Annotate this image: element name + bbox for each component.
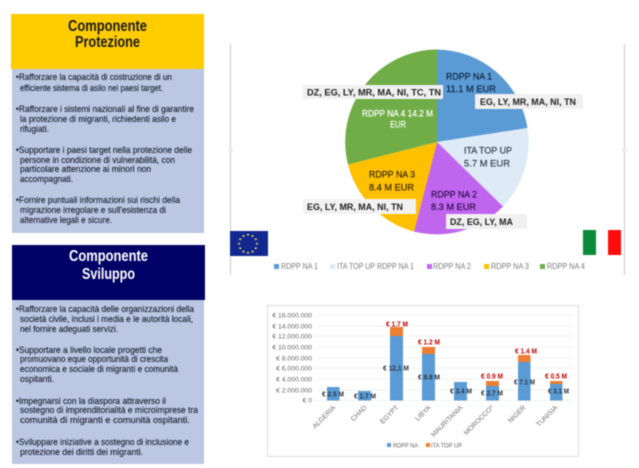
y axis labels: € 16.000.000 <box>272 312 312 320</box>
text block: protezione bullets: alternative legali e sicure. <box>20 215 112 225</box>
category labels: EGYPT <box>379 404 400 426</box>
pie chart: ITA TOP UP <box>464 146 512 156</box>
value labels: RDPP NA: € 3.1 M <box>548 386 569 396</box>
text block: sviluppo bullets: sostegno di imprenditorialità e microimprese tra <box>20 405 198 415</box>
text block: sviluppo bullets <box>12 300 204 464</box>
text block: protezione bullets: migrazione irregolare e sull'esistenza di <box>20 205 166 215</box>
text block: sviluppo bullets: promuovano eque opportunità di crescita <box>20 354 168 364</box>
y axis labels: € 2.000.000 <box>276 388 312 394</box>
value labels: RDPP NA: € 2.5 M <box>322 390 344 398</box>
pie chart: RDPP NA 2 <box>431 190 477 200</box>
callout: DZ EG LY MR MA NI TC TN: DZ, EG, LY, MR, MA, NI, TC, TN <box>307 88 441 98</box>
heading: componente sviluppo: Componente <box>69 248 148 265</box>
callout: EG LY MR MA NI TN blue: EG, LY, MR, MA, NI, TN <box>480 97 576 107</box>
text block: protezione bullets: •Rafforzare i sistemi nazionali al fine di garantire <box>16 104 194 114</box>
category labels: CHAD <box>350 404 368 423</box>
panel: pie chart frame <box>229 44 626 275</box>
callout: EG LY MR MA NI TN green-yellow: EG, LY, MR, MA, NI, TN <box>307 202 403 212</box>
text block: sviluppo bullets: •Impegnarsi con la diaspora attraverso il <box>16 396 166 406</box>
legend: bar chart: ITA TOP UP <box>431 442 462 450</box>
pie chart: 8.3 M EUR <box>431 202 476 213</box>
heading: componente protezione: Protezione <box>75 34 140 51</box>
text block: protezione bullets: la protezione di migranti, richiedenti asilo e <box>20 114 176 124</box>
pie chart: RDPP NA 3 <box>369 170 415 180</box>
legend: pie chart <box>274 262 585 271</box>
value labels: ITA TOP UP: € 1.4 M <box>515 346 537 356</box>
y axis labels: € 6.000.000 <box>276 366 312 372</box>
text block: sviluppo bullets: •Supportare a livello locale progetti che <box>16 345 162 355</box>
panel: componente sviluppo <box>12 245 205 464</box>
callout: DZ EG LY MA <box>446 214 527 229</box>
category labels <box>312 404 560 439</box>
y axis labels: € 10.000.000 <box>272 344 312 352</box>
callout: EG LY MR MA NI TN green-yellow <box>303 199 416 214</box>
legend: pie chart: RDPP NA 1 <box>281 262 318 271</box>
legend: pie chart: RDPP NA 3 <box>491 262 529 271</box>
legend: bar chart: RDPP NA <box>393 442 418 450</box>
value labels: RDPP NA <box>322 364 569 400</box>
value labels: RDPP NA: € 7.1 M <box>514 378 535 386</box>
text block: protezione bullets: particolare attenzione ai minori non <box>20 164 151 174</box>
y axis labels: € 0 <box>303 398 312 404</box>
text block: protezione bullets: efficiente sistema di asilo nei paesi target. <box>20 83 163 93</box>
heading: componente protezione <box>11 14 204 69</box>
value labels: ITA TOP UP: € 1.7 M <box>386 320 408 328</box>
legend: pie chart: RDPP NA 2 <box>433 262 471 271</box>
y axis labels: € 14.000.000 <box>272 324 312 330</box>
y axis labels: € 12.000.000 <box>272 334 312 340</box>
pie chart: RDPP NA 4 14.2 M <box>362 108 433 120</box>
y axis labels: € 4.000.000 <box>276 376 312 384</box>
heading: componente protezione: Componente <box>68 18 147 35</box>
value labels: RDPP NA: € 3.4 M <box>450 386 472 396</box>
text block: sviluppo bullets: nel fornire adeguati servizi. <box>20 324 118 334</box>
pie chart: RDPP NA 1 <box>446 72 492 82</box>
legend: pie chart: RDPP NA 4 <box>547 262 585 271</box>
legend: bar chart <box>387 442 462 450</box>
value labels: RDPP NA: € 8.8 M <box>418 372 440 382</box>
value labels: RDPP NA: € 1.7 M <box>354 392 376 400</box>
icon: Italian flag <box>583 230 621 255</box>
pie chart: 5.7 M EUR <box>464 158 510 170</box>
category labels: TUNISIA <box>535 404 560 428</box>
text block: sviluppo bullets: economica e sociale di migranti e comunità <box>20 364 178 374</box>
legend: pie chart: ITA TOP UP RDPP NA 1 <box>337 262 414 271</box>
value labels: ITA TOP UP: € 0.5 M <box>545 372 567 380</box>
value labels: RDPP NA: € 2.7 M <box>481 388 503 398</box>
heading: componente sviluppo: Sviluppo <box>82 266 135 283</box>
text block: protezione bullets: •Fornire puntuali informazioni sui rischi della <box>16 195 180 205</box>
pie chart: EUR <box>390 120 406 130</box>
value labels: RDPP NA: € 12,1 M <box>383 364 409 372</box>
text block: sviluppo bullets: •Rafforzare la capacità delle organizzazioni della <box>16 304 194 314</box>
text block: sviluppo bullets: comunità di migranti e comunità ospitanti. <box>20 415 190 425</box>
text block: protezione bullets <box>12 69 204 233</box>
category labels: NIGER <box>507 404 527 425</box>
callout: DZ EG LY MA: DZ, EG, LY, MA <box>450 217 513 227</box>
y axis labels <box>272 312 312 404</box>
pie chart: 11.1 M EUR <box>446 84 496 95</box>
panel: componente protezione <box>11 14 204 233</box>
text block: protezione bullets: •Supportare i paesi target nella protezione delle <box>16 145 192 155</box>
text block: sviluppo bullets: società civile, inclusi i media e le autorità locali, <box>20 314 193 324</box>
callout: EG LY MR MA NI TN blue <box>475 94 583 109</box>
pie chart: 8.4 M EUR <box>369 182 414 194</box>
value labels: ITA TOP UP: € 0.9 M <box>481 372 503 380</box>
text block: protezione bullets: •Rafforzare la capacità di costruzione di un <box>16 72 172 82</box>
y axis labels: € 8.000.000 <box>276 356 312 362</box>
heading: componente sviluppo <box>12 245 205 300</box>
icon: EU flag <box>230 231 268 256</box>
category labels: MOROCCO* <box>463 404 496 437</box>
text block: protezione bullets: accompagnati. <box>20 174 73 184</box>
category labels: MAURITANIA <box>430 404 465 439</box>
text block: protezione bullets: rifugiati. <box>20 124 49 134</box>
bars: RDPP NA <box>327 336 562 400</box>
text block: sviluppo bullets: protezione dei diritti dei migranti. <box>20 447 143 457</box>
text block: sviluppo bullets: •Sviluppare iniziative a sostegno di inclusione e <box>16 437 189 447</box>
text block: sviluppo bullets: ospitanti. <box>20 374 54 384</box>
category labels: LIBYA <box>414 404 433 423</box>
bars: ITA TOP UP <box>390 327 562 386</box>
category labels: ALGERIA <box>312 404 338 430</box>
value labels: ITA TOP UP: € 1.2 M <box>418 338 440 346</box>
bar chart <box>268 306 578 456</box>
value labels: ITA TOP UP <box>386 320 567 380</box>
callout: DZ EG LY MR MA NI TC TN <box>303 85 443 99</box>
pie chart <box>345 50 529 234</box>
text block: protezione bullets: persone in condizione di vulnerabilità, con <box>20 155 175 165</box>
